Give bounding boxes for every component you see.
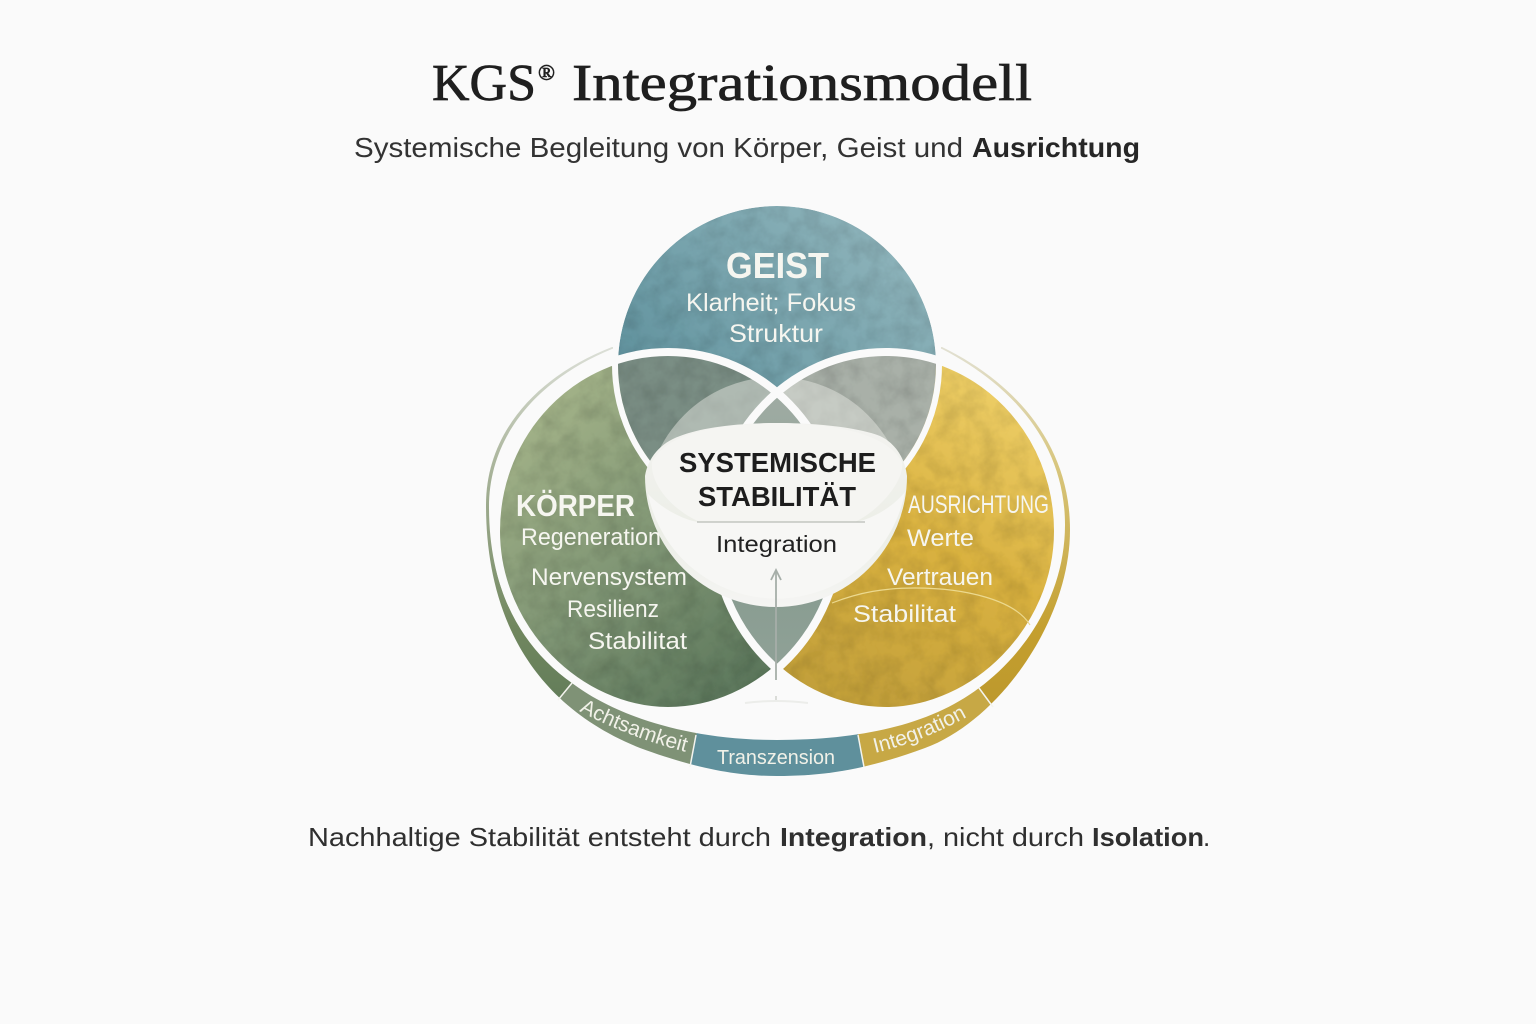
arrow [771,570,781,680]
text: Körper: Stabilitat [588,628,687,655]
text: Geist: Klarheit; Fokus [686,289,856,317]
text: Ausrichtung [853,491,1049,628]
heading: SYSTEMISCHE [679,447,876,478]
band segment: Achtsamkeit [560,683,697,764]
lower white area [648,492,905,599]
footer statement: Nachhaltige Stabilität entsteht durch [308,822,771,852]
lighter inner circle, left part [660,379,771,448]
footer statement: , nicht durch [927,822,1084,852]
lighter inner circle, right part [783,380,888,440]
circle: Körper [496,352,840,711]
venn diagram [486,206,1070,776]
title: KGS [432,55,536,112]
white inner area [489,349,1065,740]
footer statement: Isolation [1092,822,1204,852]
text: Körper [516,488,687,655]
ring labels: Transzension [717,747,835,769]
text: Körper: Resilienz [567,596,659,623]
text: Körper: KÖRPER [516,488,635,523]
outer ring band [486,347,1070,776]
thin curve in gold area [832,588,1030,625]
text: Geist: GEIST [726,245,829,286]
center: Systemische Stabilität: STABILITÄT [698,481,856,512]
circle: Ausrichtung [714,352,1058,711]
center: Systemische Stabilität [645,423,907,607]
overlap: Geist and Körper [618,356,762,460]
band segment: right gold [941,347,1070,704]
footer statement: Integration [780,822,927,852]
text: Geist [686,245,856,348]
band segment: Integration [858,688,990,766]
text: Körper: Nervensystem [531,564,687,591]
text: Körper: Regeneration [521,524,661,551]
small mark below arrow [745,696,808,703]
text: Ausrichtung: Vertrauen [887,564,993,591]
ring labels [579,700,966,769]
upper dome highlight [652,423,902,522]
footer statement: . [1203,822,1210,852]
subtitle: Ausrichtung [972,132,1140,163]
text: Ausrichtung: AUSRICHTUNG [908,491,1049,519]
text: Ausrichtung: Werte [907,525,974,552]
subtitle: Systemische Begleitung von Körper, Geist und [354,132,963,163]
title [432,55,1032,112]
ring labels: Integration [873,708,966,752]
ring labels: Achtsamkeit [579,700,688,752]
circles with watercolor texture [496,206,1058,711]
band segment: Transzension [691,733,864,776]
divider [697,521,865,523]
band segment: left olive [486,347,613,698]
integration label: Integration [716,531,837,557]
title: ® [538,60,555,85]
text: Ausrichtung: Stabilitat [853,601,956,628]
overlap: Körper and Ausrichtung [732,398,823,664]
white outlines [496,203,1058,711]
footer statement [308,822,1210,852]
title: Integrationsmodell [572,55,1032,112]
circle: Geist [618,206,936,524]
overlap: Geist and Ausrichtung [783,356,936,462]
text: Geist: Struktur [729,320,823,348]
